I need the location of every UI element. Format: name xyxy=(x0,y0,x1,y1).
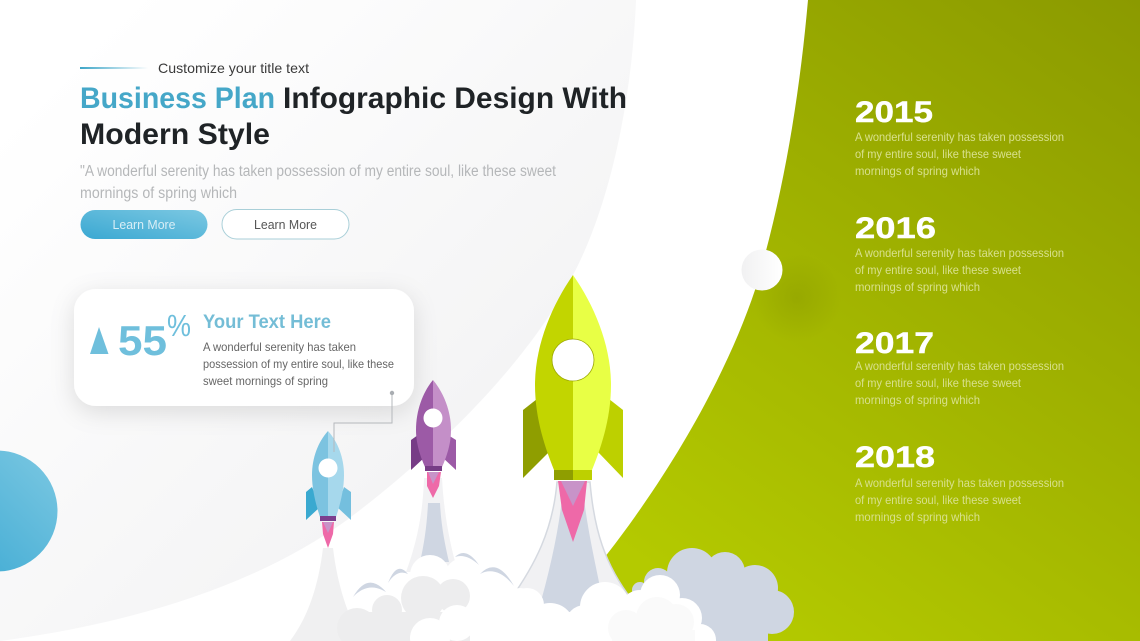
card body text: sweet mornings of spring xyxy=(203,374,328,388)
connector line xyxy=(334,394,392,452)
timeline 2015 xyxy=(855,96,1064,178)
title: Modern Style xyxy=(80,118,270,151)
smoke trail: small rocket xyxy=(290,548,362,641)
card heading: Your Text Here xyxy=(203,312,331,333)
title: Infographic Design With xyxy=(283,82,627,115)
timeline 2018: A wonderful serenity has taken possession xyxy=(855,476,1064,490)
timeline 2015: A wonderful serenity has taken possession xyxy=(855,130,1064,144)
eyebrow line xyxy=(80,67,148,69)
background: grey curved panel xyxy=(0,0,636,641)
shadow behind white dot xyxy=(753,254,841,342)
timeline 2017: mornings of spring which xyxy=(855,393,980,407)
timeline 2018: 2018 xyxy=(855,441,935,474)
medium purple rocket xyxy=(411,380,456,498)
cloud outline arcs xyxy=(353,553,514,597)
timeline 2016 xyxy=(855,212,1064,294)
timeline 2016: 2016 xyxy=(855,212,936,245)
card body text: A wonderful serenity has taken xyxy=(203,340,356,354)
stat 55 percent xyxy=(118,308,191,364)
timeline 2017 xyxy=(855,327,1064,407)
timeline 2017: of my entire soul, like these sweet xyxy=(855,376,1022,390)
stat 55 percent: 55 xyxy=(118,317,167,364)
card body text xyxy=(203,340,394,388)
timeline 2018: of my entire soul, like these sweet xyxy=(855,493,1022,507)
background: green curved panel xyxy=(540,0,1140,641)
large green rocket xyxy=(523,275,623,542)
title xyxy=(80,82,627,151)
button: outline xyxy=(222,210,349,239)
off-white cloud foreground xyxy=(608,597,695,641)
white dot on curve xyxy=(742,250,782,290)
card body text: possession of my entire soul, like these xyxy=(203,357,394,371)
smoke trail: large rocket xyxy=(510,482,632,612)
stat 55 percent: % xyxy=(167,308,191,343)
blue semicircle xyxy=(0,450,58,572)
grey cloud left xyxy=(337,576,472,641)
callout card xyxy=(74,289,414,406)
timeline 2017: A wonderful serenity has taken possession xyxy=(855,359,1064,373)
smoke trail: medium rocket xyxy=(406,478,458,572)
up triangle icon xyxy=(90,327,108,354)
timeline 2017: 2017 xyxy=(855,327,934,360)
eyebrow text: Customize your title text xyxy=(158,60,309,76)
white clouds back xyxy=(352,555,544,641)
timeline 2016: of my entire soul, like these sweet xyxy=(855,263,1022,277)
timeline 2015: 2015 xyxy=(855,96,933,129)
timeline 2015: mornings of spring which xyxy=(855,164,980,178)
timeline 2018 xyxy=(855,441,1064,524)
timeline 2015: of my entire soul, like these sweet xyxy=(855,147,1022,161)
small blue rocket xyxy=(306,431,351,548)
button: outline: Learn More xyxy=(254,217,317,232)
intro paragraph: mornings of spring which xyxy=(80,185,237,202)
connector dot xyxy=(390,391,394,395)
timeline 2018: mornings of spring which xyxy=(855,510,980,524)
title: Business Plan xyxy=(80,82,275,115)
timeline 2016: mornings of spring which xyxy=(855,280,980,294)
timeline 2016: A wonderful serenity has taken possession xyxy=(855,246,1064,260)
button: filled: Learn More xyxy=(112,217,176,232)
white clouds front xyxy=(410,575,716,641)
button: filled xyxy=(80,210,208,239)
intro paragraph: "A wonderful serenity has taken possession of my entire soul, like these sweet xyxy=(80,163,557,180)
grey cloud right xyxy=(632,548,794,641)
intro paragraph xyxy=(80,163,557,202)
